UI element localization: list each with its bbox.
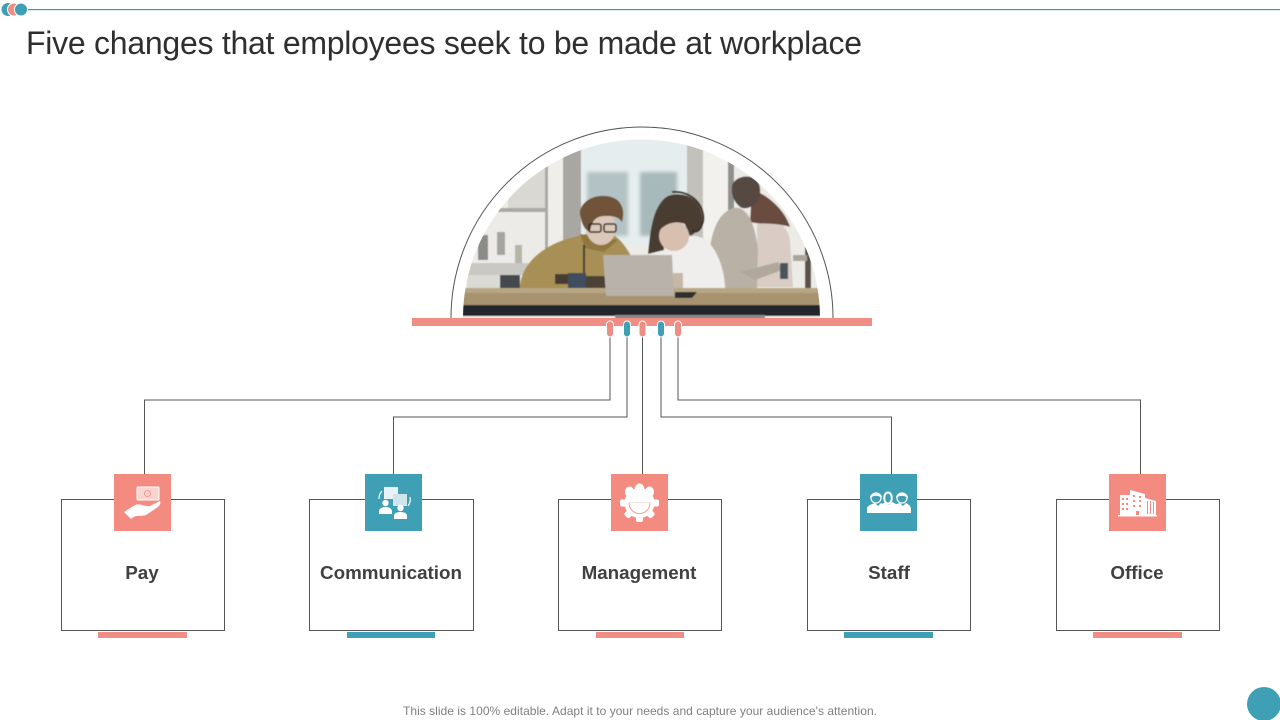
icon: three staff members — [867, 492, 911, 513]
page corner circle — [1247, 687, 1280, 720]
card: Communication: Communication — [320, 562, 462, 583]
card: Staff: Staff — [868, 562, 911, 583]
book and mug — [555, 274, 568, 284]
icon: office building — [1118, 490, 1157, 516]
icon: hand holding money — [124, 487, 160, 519]
connector pills — [606, 321, 682, 337]
card: Office: Office — [1110, 562, 1164, 583]
table — [464, 292, 820, 306]
card: Pay: Pay — [125, 562, 159, 583]
photo: people working at a table — [460, 130, 825, 320]
card: Staff — [808, 474, 970, 638]
laptop — [603, 255, 674, 296]
card: Management — [558, 474, 722, 638]
right person — [686, 236, 726, 289]
background couple — [757, 219, 793, 287]
left person — [520, 233, 632, 288]
connector lines — [144, 336, 1140, 474]
title: Five changes that employees seek to be made at workplace — [26, 25, 862, 61]
card: Pay — [62, 474, 224, 638]
icon: team inside a gear — [620, 484, 659, 522]
card: Management: Management — [582, 562, 697, 583]
card: Office — [1056, 474, 1220, 638]
icon: two people talking — [379, 487, 410, 519]
footer note: This slide is 100% editable. Adapt it to your needs and capture your audience's attention. — [403, 704, 877, 718]
card: Communication — [310, 474, 474, 638]
salmon base bar — [412, 318, 872, 326]
header accent: circles and rule — [2, 3, 1280, 16]
dome outline — [451, 127, 833, 318]
